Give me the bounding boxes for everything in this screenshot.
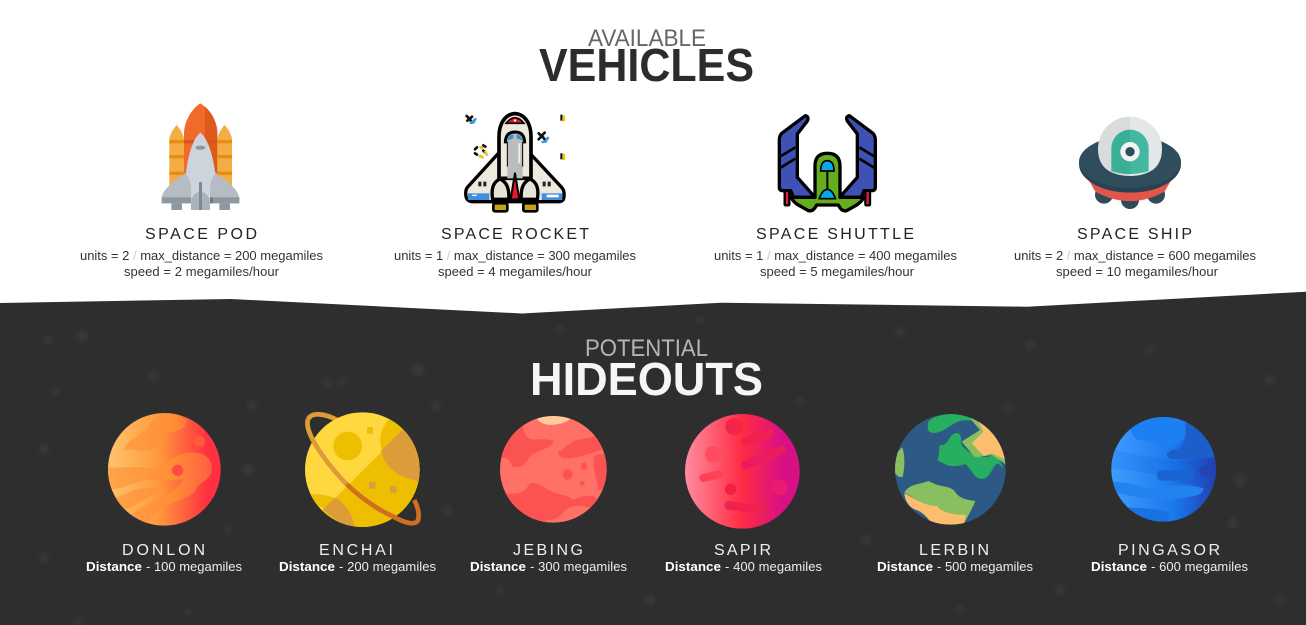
vehicle name: SPACE SHUTTLE <box>756 226 914 243</box>
heading: potential hideouts: HIDEOUTS <box>530 353 763 405</box>
vehicle: space rocket <box>394 114 636 279</box>
heading: potential hideouts: POTENTIAL <box>585 335 708 362</box>
planet name: ENCHAI <box>319 542 393 559</box>
planet distance: Distance <box>877 559 933 574</box>
vehicle: space pod <box>80 103 324 279</box>
planet: lerbin <box>877 414 1034 574</box>
planet distance <box>279 559 436 574</box>
planet name: LERBIN <box>919 542 989 559</box>
vehicle specs: speed = 5 megamiles/hour <box>760 264 915 279</box>
planet distance <box>86 559 242 574</box>
planet distance: Distance <box>1091 559 1147 574</box>
starfield specks <box>39 316 1285 625</box>
planet distance: Distance <box>279 559 335 574</box>
planet distance: - 300 megamiles <box>530 559 628 574</box>
vehicle: space ship <box>1014 117 1256 279</box>
vehicle name: SPACE POD <box>145 226 257 243</box>
icon: pink planet <box>685 414 800 529</box>
vehicle specs: units = 2 / max_distance = 600 megamiles <box>1014 248 1256 263</box>
icon: flying saucer <box>1079 117 1181 209</box>
vehicle: space shuttle <box>714 116 958 279</box>
vehicle name: SPACE SHIP <box>1077 226 1192 243</box>
icon: space shuttle <box>779 116 875 211</box>
icon: blue planet <box>1110 413 1220 523</box>
planet distance: Distance <box>86 559 142 574</box>
icon: orange planet <box>103 413 221 526</box>
icon: earth-like planet <box>893 414 1007 528</box>
vehicle specs: speed = 10 megamiles/hour <box>1056 264 1219 279</box>
planet: donlon <box>86 413 242 574</box>
vehicle specs <box>1014 248 1256 279</box>
planet distance: - 400 megamiles <box>725 559 822 574</box>
planet distance: Distance <box>665 559 721 574</box>
vehicle specs: speed = 2 megamiles/hour <box>124 264 280 279</box>
planet: pingasor <box>1091 413 1248 574</box>
icon: space pod shuttle <box>162 103 239 210</box>
vehicle specs <box>80 248 324 279</box>
vehicle specs <box>394 248 636 279</box>
planet: jebing <box>470 410 628 574</box>
planet distance <box>665 559 822 574</box>
vehicle specs <box>714 248 958 279</box>
planet distance: - 600 megamiles <box>1151 559 1248 574</box>
planet distance <box>470 559 628 574</box>
heading: available vehicles: AVAILABLE <box>588 25 706 52</box>
planet distance <box>877 559 1034 574</box>
planet name: SAPIR <box>714 542 771 559</box>
icon: red planet <box>498 410 610 523</box>
planet distance <box>1091 559 1248 574</box>
planet: enchai <box>279 407 436 574</box>
vehicle specs: speed = 4 megamiles/hour <box>438 264 593 279</box>
planet: sapir <box>665 414 822 574</box>
planet name: PINGASOR <box>1118 542 1220 559</box>
vehicle specs: units = 1 / max_distance = 400 megamiles <box>714 248 958 263</box>
planet distance: - 500 megamiles <box>937 559 1034 574</box>
heading: available vehicles: VEHICLES <box>539 39 754 91</box>
vehicle specs: units = 2 / max_distance = 200 megamiles <box>80 248 324 263</box>
planet distance: - 200 megamiles <box>339 559 436 574</box>
vehicle name: SPACE ROCKET <box>441 226 589 243</box>
planet distance: - 100 megamiles <box>146 559 242 574</box>
vehicle specs: units = 1 / max_distance = 300 megamiles <box>394 248 636 263</box>
icon: space rocket <box>466 114 565 211</box>
planet name: DONLON <box>122 542 205 559</box>
icon: ringed yellow planet <box>305 412 421 527</box>
planet distance: Distance <box>470 559 526 574</box>
planet name: JEBING <box>513 542 583 559</box>
dark lower panel <box>0 292 1306 625</box>
